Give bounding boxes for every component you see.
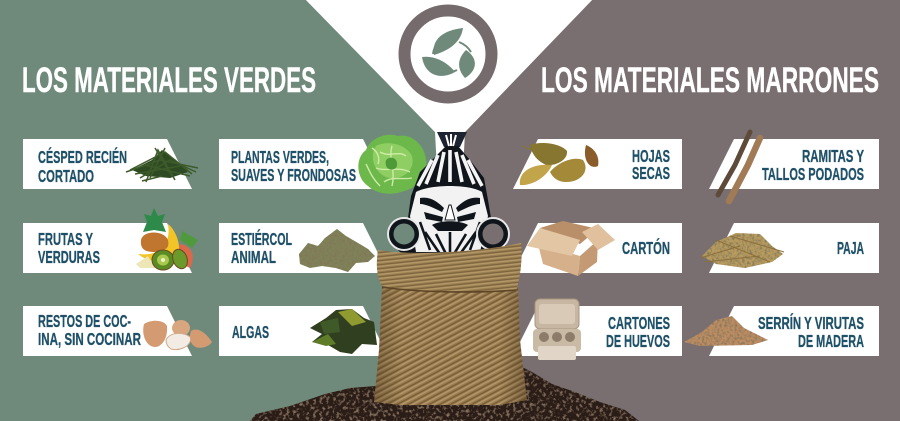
icon: dry leaves [520,143,598,185]
text: PAJA [837,238,864,258]
background: white centre wedge [306,0,592,132]
text: FRUTAS Y [38,229,93,249]
panel: serrín y virutas [684,306,879,356]
icon: seaweed [310,309,377,354]
panel: restos de cocina [23,306,212,356]
text: VERDURAS [38,247,100,267]
text: CARTONES [608,313,670,333]
text: RAMITAS Y [802,146,864,166]
text: RESTOS DE COC- [38,311,131,331]
panel: cartón [513,221,682,276]
illustration: burlap sack [374,243,527,405]
text: INA, SIN COCINAR [38,329,141,349]
icon: recycling leaves logo [404,10,492,98]
icon: egg carton [533,299,581,360]
heading: los materiales verdes: LOS MATERIALES VERDES [22,61,316,100]
text: ESTIÉRCOL [231,228,292,249]
text: SUAVES Y FRONDOSAS [231,165,356,185]
icon: egg shells [143,320,212,350]
panel: paja [700,223,879,273]
panel: estiércol animal [219,223,388,273]
panel: césped recién cortado [23,139,198,189]
background: green panel [0,0,450,421]
text: ANIMAL [231,247,276,267]
panel: hojas secas [513,139,682,189]
panel: ramitas y tallos [709,132,879,201]
icon: sawdust pile [684,316,768,346]
text: CARTÓN [622,237,670,258]
panel: cartones de huevos [513,299,682,360]
text: ALGAS [232,322,269,342]
icon: lettuce [358,135,426,194]
text: SECAS [632,163,670,183]
text: CORTADO [38,166,94,186]
panel: frutas y verduras [23,208,198,273]
background: brown panel [450,0,900,421]
icon: straw [700,233,784,268]
text: PLANTAS VERDES, [231,147,329,167]
icon: manure [299,229,375,272]
text: HOJAS [632,146,670,166]
panel: algas [219,306,388,356]
panel: plantas verdes [219,135,426,194]
illustration: tribal mask [388,132,509,256]
icon: twigs [718,132,760,201]
icon: cut grass [126,148,198,182]
illustration: soil mound [250,366,639,421]
text: DE HUEVOS [606,331,670,351]
text: CÉSPED RECIÉN [38,146,127,167]
icon: cardboard box [527,221,615,276]
icon: fruit pile [136,208,198,271]
